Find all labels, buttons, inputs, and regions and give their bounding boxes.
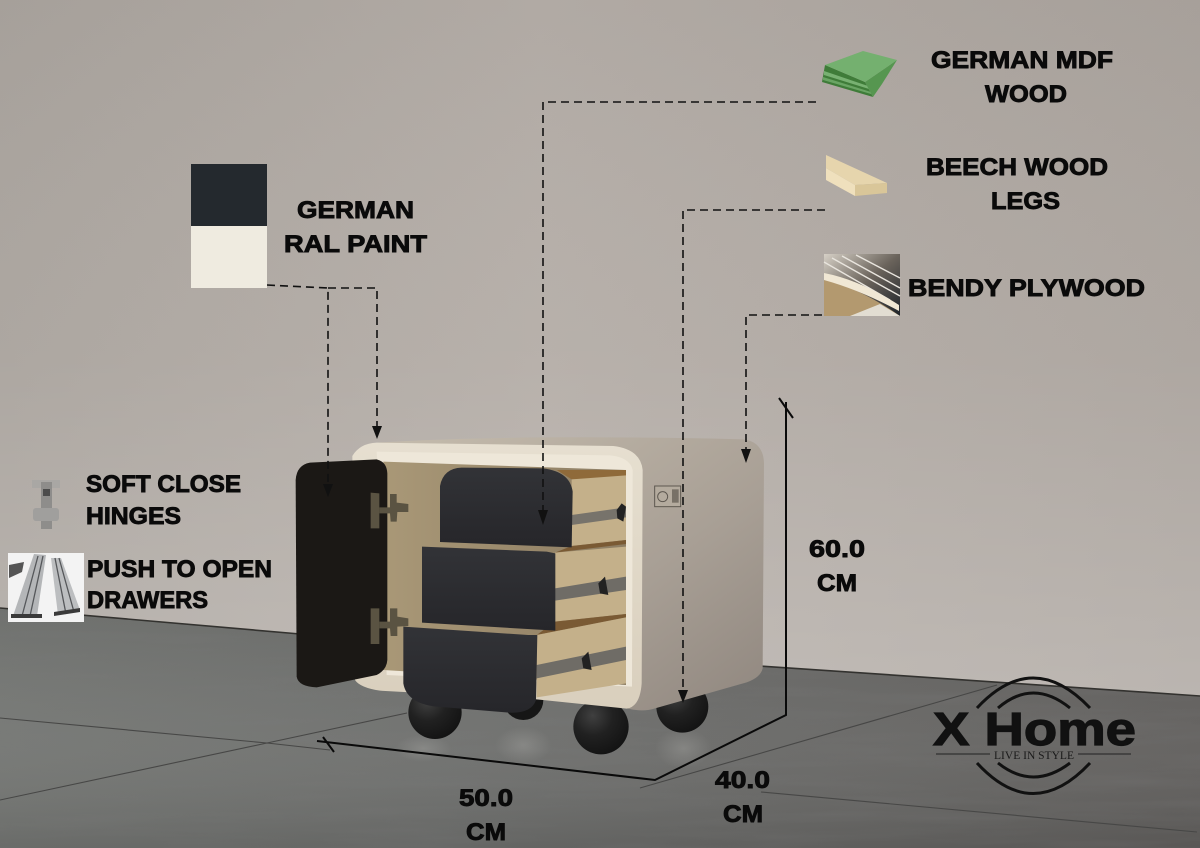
floor reflections — [395, 727, 712, 768]
open door — [296, 459, 387, 687]
label: height 60 cm: CM — [817, 570, 857, 597]
dashed leader: bendy plywood — [741, 315, 822, 463]
label: german mdf wood — [931, 47, 1113, 108]
icon: green MDF boards — [822, 51, 897, 97]
label: beech wood legs: BEECH WOOD — [926, 154, 1108, 181]
label: soft close hinges — [86, 471, 241, 530]
dashed leader: beech legs — [678, 210, 825, 703]
logo: X Home: LIVE IN STYLE — [994, 748, 1074, 762]
logo: X Home: X Home — [933, 703, 1136, 755]
label: soft close hinges: SOFT CLOSE — [86, 471, 241, 498]
label: german mdf wood: GERMAN MDF — [931, 47, 1113, 74]
cabinet side and top — [377, 437, 764, 710]
label: german mdf wood: WOOD — [985, 81, 1067, 108]
top drawer — [440, 468, 626, 553]
label: width 50 cm — [459, 785, 513, 846]
label: push to open drawers — [87, 556, 272, 614]
label: push to open drawers: DRAWERS — [87, 587, 208, 614]
label: german ral paint: GERMAN — [297, 197, 414, 224]
icon: drawer slides photo — [8, 553, 84, 622]
icon: soft close hinge — [32, 480, 60, 529]
label: height 60 cm: 60.0 — [809, 536, 865, 563]
label: width 50 cm: 50.0 — [459, 785, 513, 812]
dashed leader: RAL paint — [267, 285, 382, 497]
logo: X Home — [933, 678, 1136, 794]
cabinet front frame — [352, 443, 643, 709]
label: width 50 cm: CM — [466, 819, 506, 846]
ball legs — [408, 680, 708, 754]
maker label — [655, 486, 681, 507]
label: beech wood legs: LEGS — [991, 188, 1060, 215]
dashed leader: MDF wood — [538, 102, 816, 525]
cabinet interior — [383, 462, 626, 685]
label: depth 40 cm: 40.0 — [715, 767, 770, 794]
nightstand illustration — [296, 437, 764, 768]
label: push to open drawers: PUSH TO OPEN — [87, 556, 272, 583]
label: height 60 cm — [809, 536, 865, 597]
label: soft close hinges: HINGES — [86, 503, 181, 530]
label: german ral paint: RAL PAINT — [284, 231, 427, 258]
door hinges — [371, 493, 408, 644]
label: depth 40 cm: CM — [723, 801, 763, 828]
bottom drawer — [403, 617, 626, 713]
icon: bendy plywood — [824, 254, 900, 316]
icon: paint swatches — [191, 164, 267, 288]
middle drawer — [422, 547, 626, 635]
label: depth 40 cm — [715, 767, 770, 828]
label: german ral paint — [284, 197, 427, 258]
background: concrete floor — [0, 608, 1200, 848]
dimension lines — [317, 398, 793, 780]
icon: beech plank — [826, 155, 887, 196]
label: bendy plywood: BENDY PLYWOOD — [908, 275, 1145, 302]
label: beech wood legs — [926, 154, 1108, 215]
